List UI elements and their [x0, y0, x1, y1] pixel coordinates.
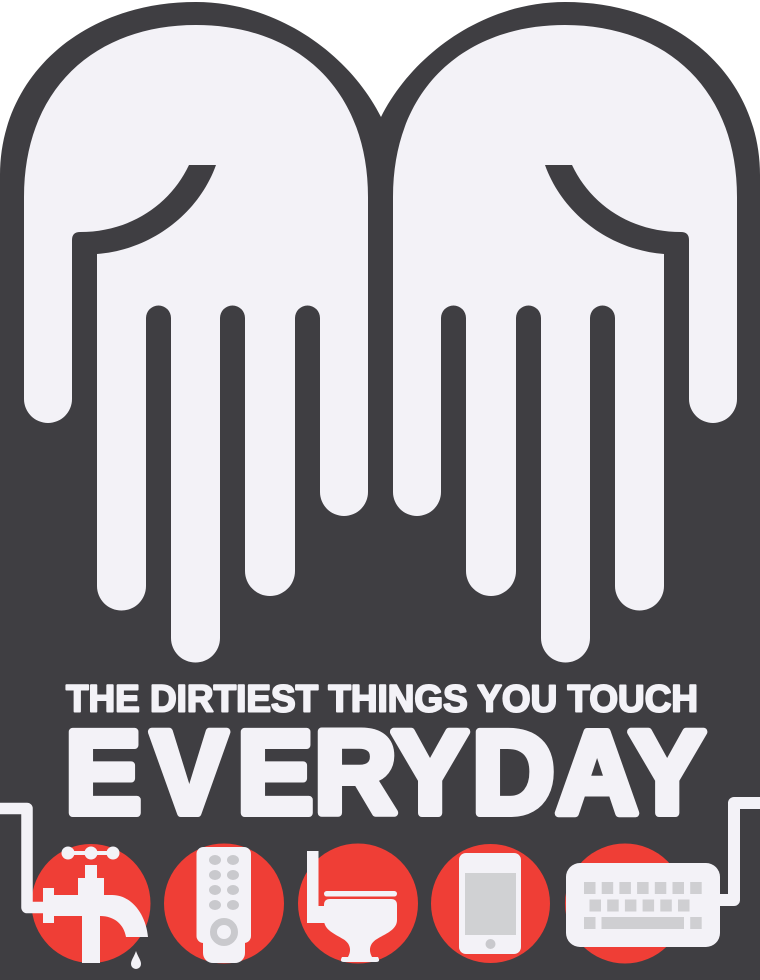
- title line: THE DIRTIEST THINGS YOU TOUCH: [66, 678, 698, 720]
- icon: faucet: [32, 844, 150, 969]
- pipe to faucet: [0, 808, 46, 908]
- icon: toilet: [298, 844, 418, 964]
- icon: keyboard: [565, 844, 720, 964]
- keyboard cable: [718, 803, 760, 900]
- right hand: [393, 25, 737, 662]
- left hand: [24, 25, 368, 662]
- title: everyday: EVERYDAY: [65, 706, 705, 838]
- icon: remote control: [164, 844, 284, 964]
- icon: smartphone: [431, 844, 550, 963]
